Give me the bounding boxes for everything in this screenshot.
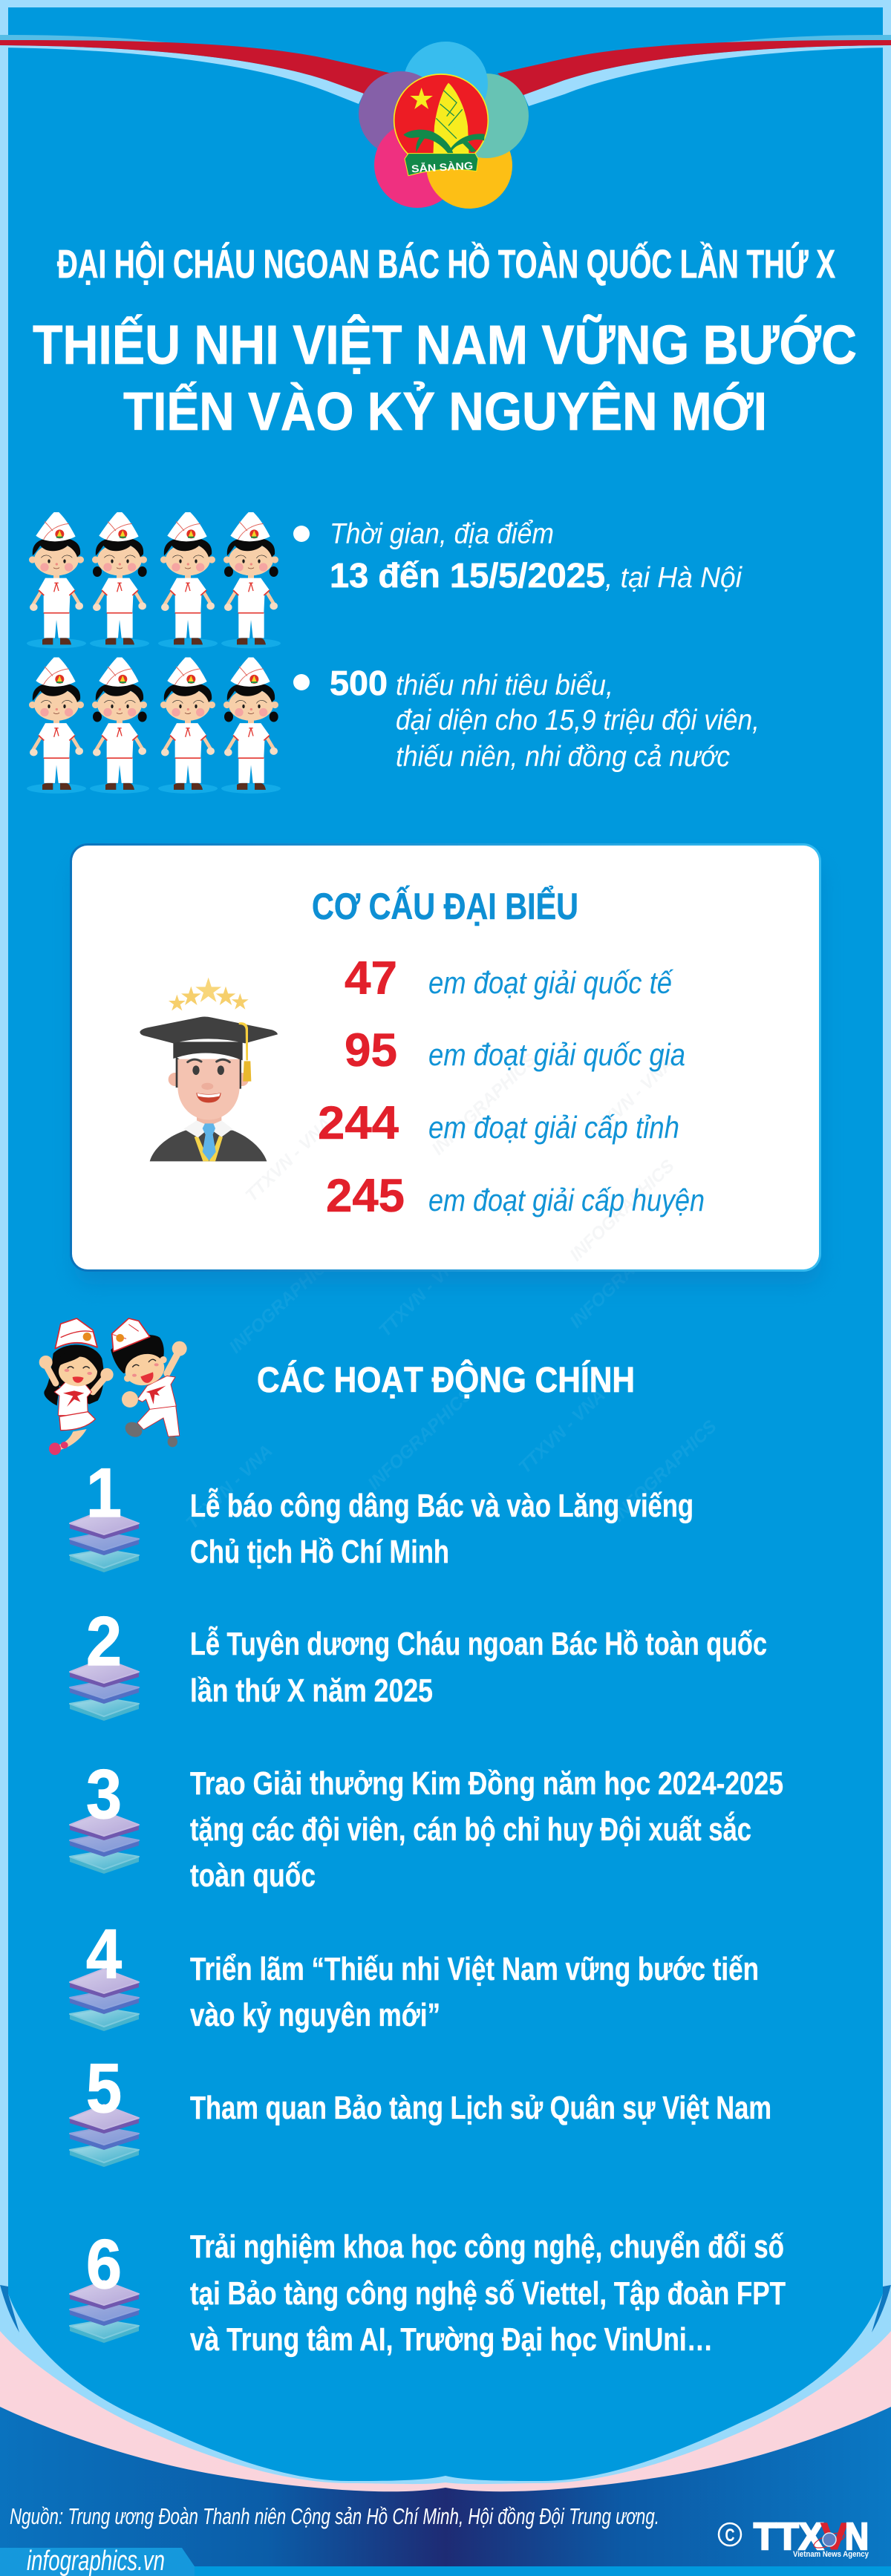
watermarks: TTXVN - VNA (182, 1441, 277, 1533)
panel: delegate structure: INFOGRAPHICS (428, 1050, 541, 1159)
watermarks (182, 1223, 721, 1533)
icon: jumping children (39, 1318, 187, 1455)
logo: TTXVN: Vietnam News Agency (793, 2550, 869, 2559)
panel heading: CƠ CẤU ĐẠI BIỂU (312, 886, 578, 927)
stat: international: 47 (345, 952, 397, 1004)
stat: provincial (318, 1097, 679, 1149)
logo: petals and Young Pioneers emblem (359, 42, 529, 209)
panel: delegate structure: TTXVN - VNA (241, 1114, 336, 1206)
emblem: SẴN SÀNG (411, 160, 474, 174)
activity 2: 2 (86, 1602, 122, 1680)
logo: TTXVN (719, 2515, 869, 2559)
activity 2 (70, 1602, 767, 1721)
panel: delegate structure: INFOGRAPHICS (566, 1156, 679, 1265)
logo: TTXVN: TTX (754, 2515, 823, 2557)
heading: main activities: CÁC HOẠT ĐỘNG CHÍNH (257, 1359, 635, 1400)
activity 3 (70, 1755, 783, 1894)
edge slivers (0, 2285, 891, 2333)
pink curved band (0, 2301, 891, 2491)
footer band (0, 2361, 891, 2576)
ribbon left (0, 35, 392, 104)
fact: 500 children: 500 (330, 664, 388, 702)
watermarks: INFOGRAPHICS (364, 1385, 477, 1494)
watermarks: INFOGRAPHICS (608, 1416, 721, 1526)
icons: row 2 of children (27, 657, 281, 794)
stat: international (345, 952, 673, 1004)
fact: time and place: Thời gian, địa điểm (330, 518, 554, 550)
watermarks: TTXVN - VNA (375, 1248, 469, 1341)
stat: provincial: 244 (318, 1097, 399, 1149)
stat: district: em đoạt giải cấp huyện (428, 1183, 705, 1217)
stat: national (345, 1024, 685, 1076)
activity 6: 6 (86, 2225, 122, 2303)
panel: delegate structure (70, 843, 821, 1284)
fact: 500 children (293, 664, 760, 773)
logo: TTXVN: C (725, 2526, 735, 2546)
watermarks: INFOGRAPHICS (566, 1223, 679, 1332)
stat: national: em đoạt giải quốc gia (428, 1037, 685, 1072)
activity 4 (70, 1915, 759, 2033)
activity 3: toàn quốc (190, 1857, 316, 1894)
ribbon (0, 35, 891, 106)
main title line 2: TIẾN VÀO KỶ NGUYÊN MỚI (123, 382, 767, 442)
stat: provincial: em đoạt giải cấp tỉnh (428, 1110, 679, 1145)
activity 4: 4 (86, 1915, 122, 1993)
activity 5: 5 (86, 2049, 122, 2127)
fact: 500 children: thiếu nhi tiêu biểu, (396, 670, 613, 702)
activity 1: Lễ báo công dâng Bác và vào Lăng viếng (190, 1487, 693, 1524)
activity 5 (70, 2049, 771, 2167)
fact: 500 children: đại diện cho 15,9 triệu đội viên, (396, 705, 760, 736)
logo: TTXVN: N (845, 2515, 869, 2557)
activity 4: vào kỷ nguyên mới” (190, 1997, 440, 2033)
activity 1: 1 (86, 1454, 122, 1531)
logo: TTXVN: V (820, 2515, 848, 2557)
fact: time and place: , tại Hà Nội (605, 562, 742, 594)
activity 3: 3 (86, 1755, 122, 1833)
activity 1: Chủ tịch Hồ Chí Minh (190, 1534, 449, 1570)
activity 2: lần thứ X năm 2025 (190, 1673, 433, 1709)
activity 6: và Trung tâm AI, Trường Đại học VinUni… (190, 2321, 713, 2358)
title (33, 241, 857, 442)
ribbon right (497, 35, 891, 106)
icon: graduate with stars (140, 978, 278, 1161)
watermarks: TTXVN - VNA (515, 1385, 610, 1477)
stat: district (326, 1170, 705, 1222)
icon: boy (111, 1318, 187, 1447)
activity 4: Triển lãm “Thiếu nhi Việt Nam vững bước tiến (190, 1951, 759, 1987)
watermarks: INFOGRAPHICS (226, 1249, 339, 1357)
stat: district: 245 (326, 1170, 405, 1222)
website tab: infographics.vn (27, 2546, 165, 2576)
bottom stripe (0, 2566, 891, 2576)
light blue curved band (0, 2286, 891, 2484)
stat: international: em đoạt giải quốc tế (428, 965, 673, 1000)
activity 1 (70, 1454, 693, 1572)
icon: girl (39, 1318, 114, 1455)
activity 3: tặng các đội viên, cán bộ chỉ huy Đội xuất sắc (190, 1811, 751, 1848)
fact: time and place (293, 518, 742, 595)
icons: row 1 of children (27, 512, 281, 648)
fact: 500 children: thiếu niên, nhi đồng cả nước (396, 741, 730, 773)
emblem (394, 74, 488, 176)
fact: time and place: 13 đến 15/5/2025 (330, 556, 605, 595)
activity 6 (70, 2225, 786, 2358)
stat: national: 95 (345, 1024, 397, 1076)
source note: Nguồn: Trung ương Đoàn Thanh niên Cộng sản Hồ Chí Minh, Hội đồng Đội Trung ương. (10, 2503, 659, 2529)
panel: delegate structure: TTXVN - VNA (583, 1053, 678, 1145)
